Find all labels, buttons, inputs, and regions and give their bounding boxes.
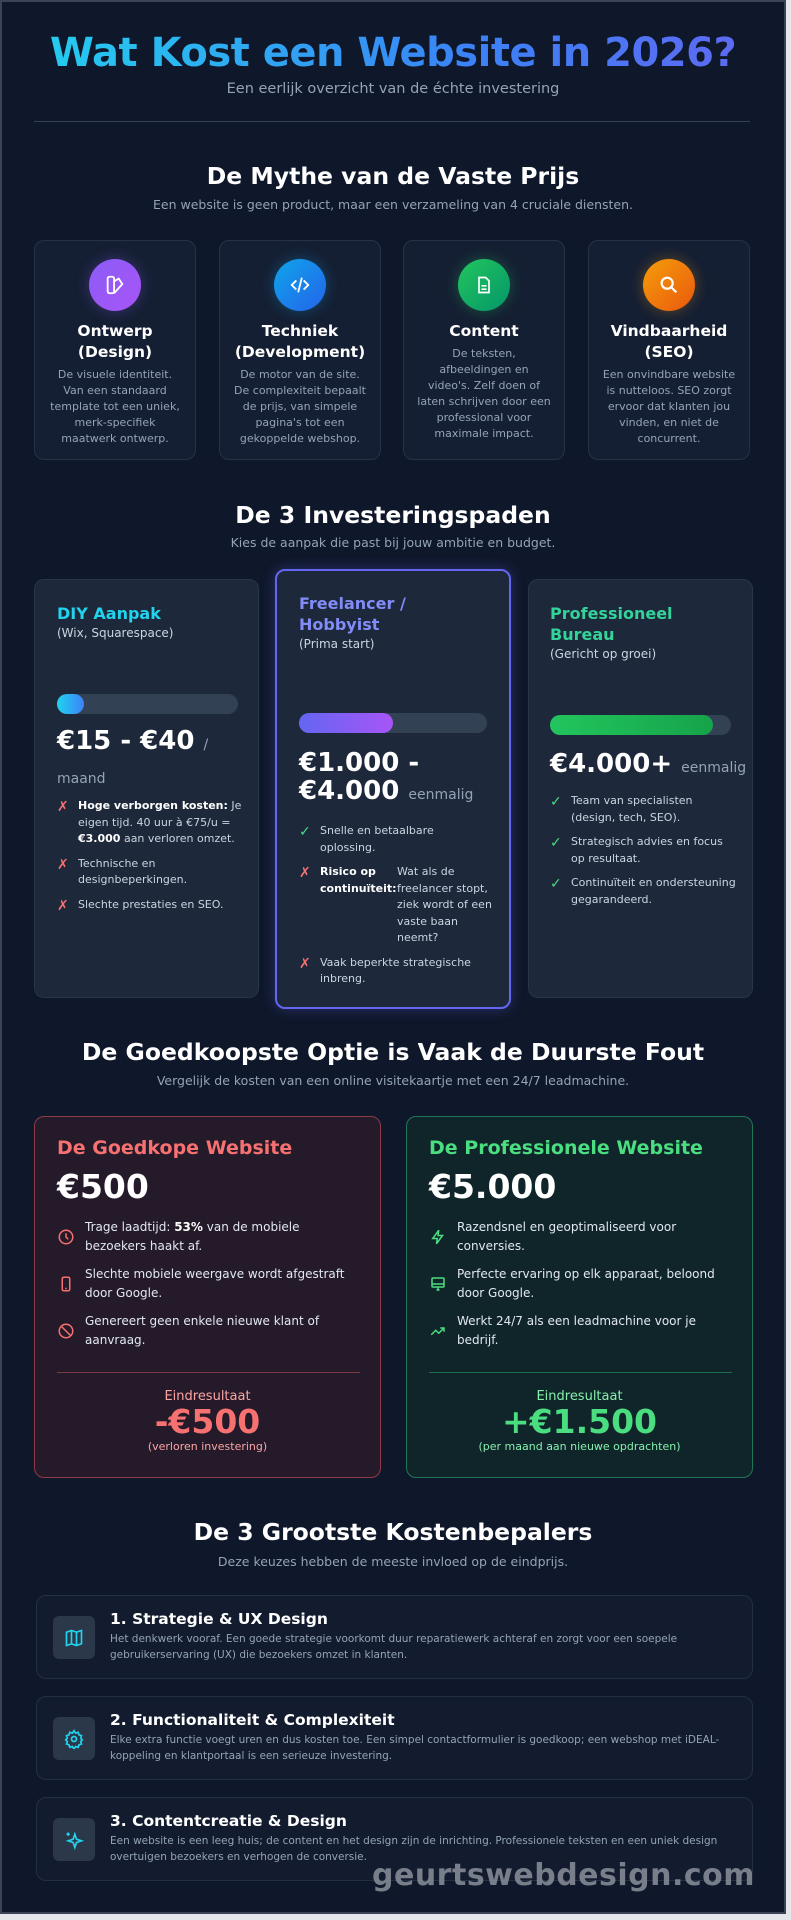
card: techniek xyxy=(219,240,381,460)
title: Wat Kost een Website in 2026? xyxy=(50,30,736,76)
result: cheap: Eindresultaat xyxy=(164,1389,251,1404)
panel: cheap website: De Goedkope Website xyxy=(57,1137,292,1159)
heading: myth: De Mythe van de Vaste Prijs xyxy=(207,162,579,190)
panel: cheap website: €500 xyxy=(57,1167,149,1206)
subheading: cost drivers: Deze keuzes hebben de meeste invloed op de eindprijs. xyxy=(218,1554,568,1569)
card: techniek: Techniek xyxy=(262,322,338,340)
result: professional: +€1.500 xyxy=(502,1402,657,1441)
heading: paths: De 3 Investeringspaden xyxy=(235,501,551,529)
card: seo: Vindbaarheid xyxy=(611,322,727,340)
factor: functionality: 2. Functionaliteit & Complexiteit xyxy=(110,1711,395,1729)
price: DIY: maand xyxy=(57,771,106,787)
panel: bureau: Team van specialisten (design, tech, SEO). xyxy=(571,794,693,824)
bar: DIY xyxy=(57,694,238,714)
card: seo: Een onvindbare website is nutteloos. SEO zorgt ervoor dat klanten jou vinden, en niet de concurrent. xyxy=(603,368,735,445)
price: freelancer: €4.000 eenmalig xyxy=(299,776,473,806)
item: slow: Trage laadtijd: 53% van de mobiele bezoekers haakt af. xyxy=(85,1220,300,1253)
panel: freelancer: Vaak beperkte strategische inbreng. xyxy=(320,956,471,985)
card: content: Content xyxy=(449,322,519,340)
bar: bureau xyxy=(550,715,731,735)
price: freelancer xyxy=(298,748,473,806)
result: cheap: -€500 xyxy=(155,1402,260,1441)
card: content xyxy=(403,240,565,460)
heading: cost drivers: De 3 Grootste Kostenbepalers xyxy=(194,1518,592,1546)
factor: functionality: Elke extra functie voegt uren en dus kosten toe. Een simpel contactformulier is goedkoop; een webshop met iDEAL-koppeling en klantportaal is een serieuze investering. xyxy=(110,1734,719,1762)
panel: DIY xyxy=(34,579,259,998)
result: cheap xyxy=(148,1389,267,1453)
card: content: De teksten, afbeeldingen en video's. Zelf doen of laten schrijven door een professional voor maximale impact. xyxy=(417,347,551,440)
item: no clients: Genereert geen enkele nieuwe klant of aanvraag. xyxy=(85,1314,319,1347)
factor: content: 3. Contentcreatie & Design xyxy=(110,1812,347,1830)
panel: freelancer xyxy=(275,569,511,1009)
panel: freelancer: Risico op continuïteit: xyxy=(320,865,397,894)
panel: bureau xyxy=(528,579,753,998)
panel: bureau: Continuïteit en ondersteuning gegarandeerd. xyxy=(571,876,736,906)
item: device: Perfecte ervaring op elk apparaat, beloond door Google. xyxy=(457,1267,715,1300)
heading: comparison: De Goedkoopste Optie is Vaak de Duurste Fout xyxy=(82,1038,704,1066)
panel: freelancer: (Prima start) xyxy=(299,637,374,651)
panel: professional website xyxy=(406,1116,753,1478)
factor: content: Een website is een leeg huis; de content en het design zijn de inrichting. Professionele teksten en een uniek design overtuigen bezoekers en verhogen de conversie. xyxy=(110,1835,717,1862)
panel: freelancer: Freelancer / xyxy=(299,594,406,613)
panel: professional website: De Professionele Website xyxy=(429,1137,703,1159)
result: professional xyxy=(478,1389,680,1453)
icon: code xyxy=(274,259,326,311)
panel: cheap website xyxy=(34,1116,381,1478)
subheading: paths: Kies de aanpak die past bij jouw ambitie en budget. xyxy=(231,535,555,550)
panel: professional website: €5.000 xyxy=(429,1167,556,1206)
card: seo xyxy=(588,240,750,460)
factor: content xyxy=(36,1797,753,1881)
watermark: geurtswebdesign.com xyxy=(372,1858,755,1893)
item: mobile: Slechte mobiele weergave wordt afgestraft door Google. xyxy=(85,1267,344,1300)
icon: map xyxy=(53,1616,95,1659)
subheading: comparison: Vergelijk de kosten van een online visitekaartje met een 24/7 leadmachine. xyxy=(157,1073,629,1088)
panel: freelancer: Snelle en betaalbare oplossing. xyxy=(320,824,434,854)
result: professional: (per maand aan nieuwe opdrachten) xyxy=(478,1440,680,1453)
card: techniek: De motor van de site. De complexiteit bepaalt de prijs, van simpele pagina's tot een gekoppelde webshop. xyxy=(234,368,366,445)
price: freelancer: €1.000 - xyxy=(299,748,419,778)
icon: sparkle xyxy=(53,1818,95,1861)
card: ontwerp: Ontwerp xyxy=(77,322,153,340)
bar: freelancer xyxy=(299,713,487,733)
icon: document xyxy=(458,259,510,311)
price: bureau: €4.000+ eenmalig xyxy=(550,749,746,779)
panel: bureau: Bureau xyxy=(550,625,615,644)
item: fast: Razendsnel en geoptimaliseerd voor conversies. xyxy=(457,1220,676,1253)
result: professional: Eindresultaat xyxy=(536,1389,623,1404)
factor: strategy: 1. Strategie & UX Design xyxy=(110,1610,328,1628)
panel: DIY: Slechte prestaties en SEO. xyxy=(78,898,223,910)
panel: bureau: Professioneel xyxy=(550,604,673,623)
subtitle: Een eerlijk overzicht van de échte investering xyxy=(227,81,559,97)
subheading: myth: Een website is geen product, maar een verzameling van 4 cruciale diensten. xyxy=(153,197,633,212)
panel: bureau: (Gericht op groei) xyxy=(550,647,656,661)
panel: DIY: (Wix, Squarespace) xyxy=(57,626,173,640)
icon: search xyxy=(643,259,695,311)
card: techniek: (Development) xyxy=(235,343,365,361)
icon: design xyxy=(89,259,141,311)
card: ontwerp: De visuele identiteit. Van een standaard template tot een uniek, merk-specifiek maatwerk ontwerp. xyxy=(50,368,180,445)
factor: strategy: Het denkwerk vooraf. Een goede strategie voorkomt duur reparatiewerk achteraf en zorgt voor een soepele gebruikerservaring (UX) die bezoekers omzet in klanten. xyxy=(110,1633,677,1660)
card: ontwerp xyxy=(34,240,196,460)
factor: strategy xyxy=(36,1595,753,1679)
price: DIY xyxy=(56,726,208,787)
panel: DIY: DIY Aanpak xyxy=(57,604,161,623)
icon: gear xyxy=(53,1717,95,1760)
card: ontwerp: (Design) xyxy=(78,343,152,361)
panel: DIY: Technische en designbeperkingen. xyxy=(78,856,187,886)
panel: DIY: Hoge verborgen kosten: Je eigen tijd. 40 uur à €75/u = €3.000 aan verloren omzet. xyxy=(78,799,241,845)
factor: functionality xyxy=(36,1696,753,1780)
item: growth: Werkt 24/7 als een leadmachine voor je bedrijf. xyxy=(457,1314,696,1347)
panel: bureau: Strategisch advies en focus op resultaat. xyxy=(571,835,723,864)
panel: freelancer: Hobbyist xyxy=(299,615,379,634)
result: cheap: (verloren investering) xyxy=(148,1440,267,1453)
card: seo: (SEO) xyxy=(644,343,694,361)
price: DIY: €15 - €40 / xyxy=(57,726,208,756)
panel: freelancer: Wat als de freelancer stopt, ziek wordt of een vaste baan neemt? xyxy=(397,865,492,944)
